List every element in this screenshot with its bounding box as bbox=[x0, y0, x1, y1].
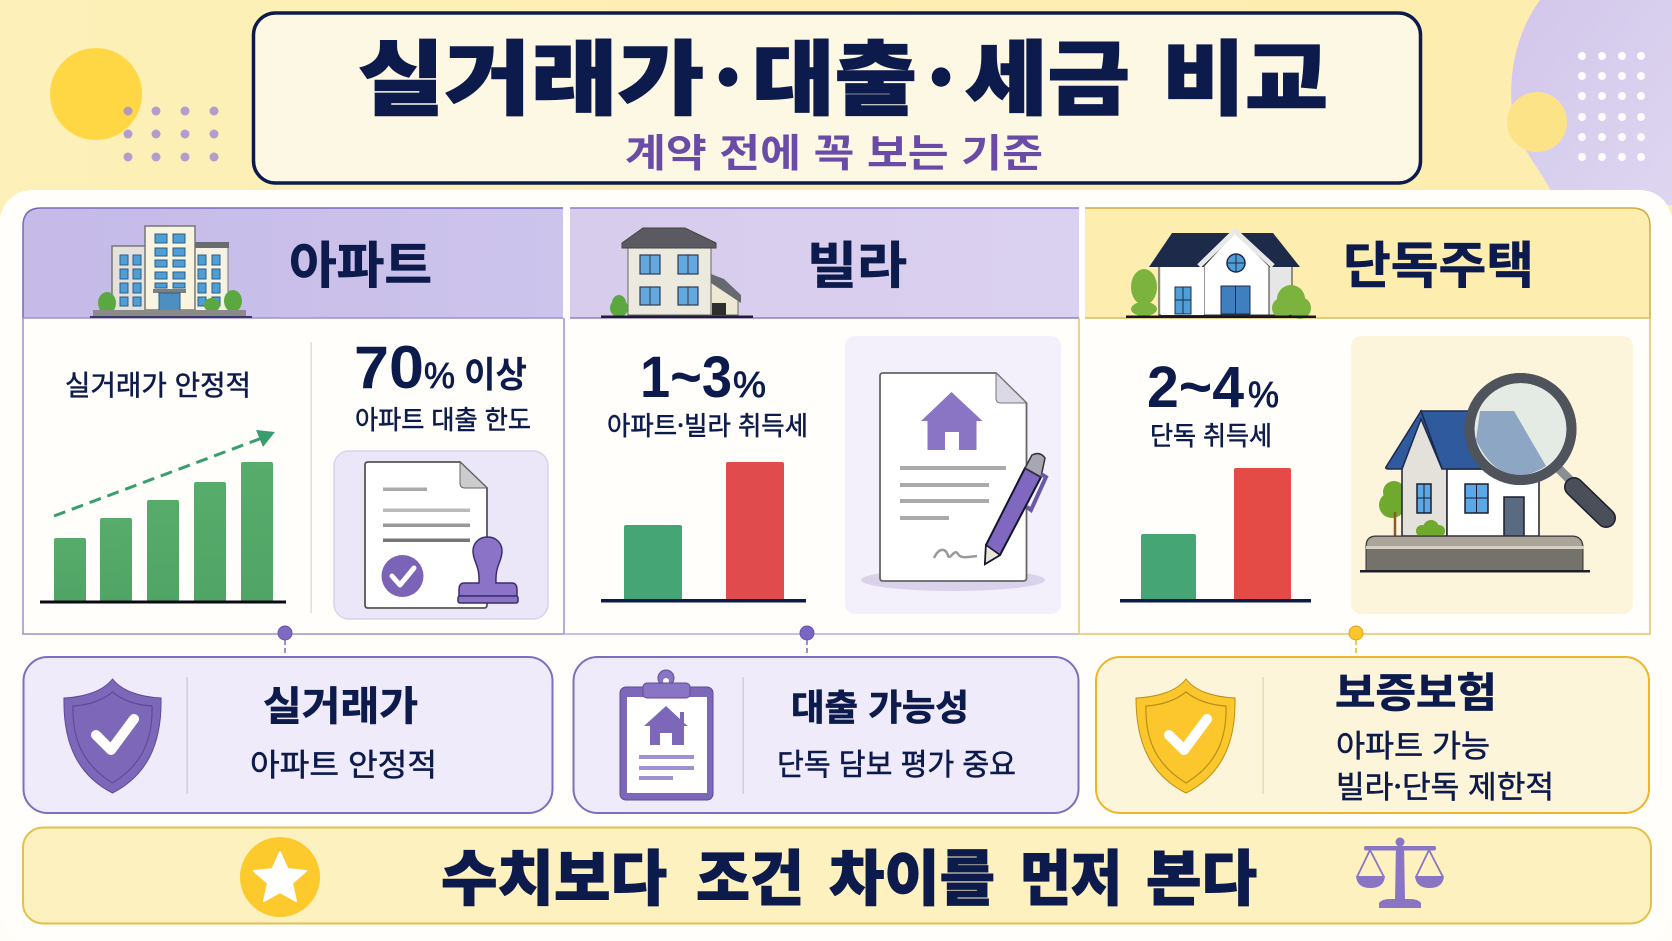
apartment header bbox=[23, 208, 563, 318]
villa header bbox=[570, 208, 1079, 318]
icon: contract with pen bbox=[845, 336, 1061, 614]
stable price label: 실거래가 안정적 bbox=[65, 364, 251, 404]
callout text: 아파트 가능 bbox=[1336, 721, 1490, 766]
callout: actual price bbox=[24, 657, 552, 813]
stat: 2~4%: 2~4 bbox=[1147, 355, 1244, 420]
stat: 2~4%: % bbox=[1248, 374, 1279, 415]
apartment heading: 아파트 bbox=[289, 226, 432, 298]
icon: detached house bbox=[1126, 231, 1316, 319]
banner text: 수치보다 bbox=[441, 831, 667, 918]
title: 비교 bbox=[1162, 15, 1328, 132]
stat: 70%: 이상 bbox=[464, 346, 527, 398]
title: · bbox=[927, 15, 955, 132]
pen bbox=[985, 454, 1046, 564]
apartment loan limit label: 아파트 대출 한도 bbox=[355, 400, 531, 437]
icon: star bbox=[240, 837, 320, 917]
bar chart: villa tax bbox=[601, 462, 806, 602]
acquisition tax label: detached: 단독 취득세 bbox=[1150, 416, 1272, 453]
callout text: 단독 담보 평가 중요 bbox=[777, 740, 1016, 784]
callout: loan possibility bbox=[574, 657, 1078, 813]
icon: stamped document bbox=[334, 451, 548, 619]
callout text bbox=[1336, 721, 1554, 807]
stat: 70%: % bbox=[424, 355, 455, 396]
bar chart: detached tax bbox=[1120, 468, 1311, 602]
stat: 70%: 70 bbox=[354, 334, 424, 401]
acquisition tax label: apartment and villa: 아파트·빌라 취득세 bbox=[607, 406, 808, 443]
callout text: 아파트 안정적 bbox=[250, 740, 437, 785]
bottom banner bbox=[23, 828, 1651, 924]
banner text: 본다 bbox=[1146, 831, 1257, 918]
bar chart: rising prices bbox=[40, 430, 286, 604]
callout heading: 대출 가능성 bbox=[791, 679, 969, 731]
panel: villa bbox=[564, 208, 1079, 657]
banner text: 먼저 bbox=[1020, 831, 1122, 918]
dot connector: detached bbox=[1349, 626, 1363, 657]
callout: guarantee insurance bbox=[1096, 657, 1649, 813]
callout heading: 보증보험 bbox=[1335, 659, 1497, 719]
icon: house under magnifier bbox=[1351, 336, 1633, 614]
stat: 70% bbox=[354, 334, 527, 401]
stat: 1~3%: % bbox=[733, 364, 766, 405]
villa heading: 빌라 bbox=[807, 226, 907, 298]
panel: apartment bbox=[23, 208, 564, 657]
decoration: right yellow circle and white dots bbox=[1507, 52, 1645, 161]
icon: purple shield bbox=[64, 679, 161, 793]
title: 실거래가 bbox=[358, 15, 704, 132]
panel: detached house bbox=[1079, 208, 1650, 657]
banner text: 조건 bbox=[696, 831, 804, 918]
decoration: left yellow circle and dots bbox=[50, 48, 218, 162]
arrow: upward trend bbox=[54, 430, 275, 516]
dot connector: apartment bbox=[278, 626, 292, 657]
title box bbox=[254, 13, 1420, 183]
icon: gold shield bbox=[1136, 679, 1235, 793]
icon: apartment building bbox=[90, 226, 252, 318]
subtitle: 계약 전에 꼭 보는 기준 bbox=[625, 123, 1043, 179]
icon: villa house bbox=[601, 228, 753, 318]
stat: 1~3%: 1~3 bbox=[640, 345, 732, 410]
callout heading: 실거래가 bbox=[263, 674, 418, 732]
title: · bbox=[714, 15, 742, 132]
icon: clipboard bbox=[620, 670, 713, 800]
dot connector: villa bbox=[800, 626, 814, 657]
detached heading: 단독주택 bbox=[1343, 226, 1534, 298]
title: 대출 bbox=[752, 15, 917, 132]
icon: balance scale bbox=[1356, 838, 1444, 908]
banner text: 차이를 bbox=[829, 831, 995, 918]
title: 세금 bbox=[965, 15, 1130, 132]
detached header bbox=[1085, 208, 1650, 318]
callout text: 빌라·단독 제한적 bbox=[1336, 762, 1554, 807]
